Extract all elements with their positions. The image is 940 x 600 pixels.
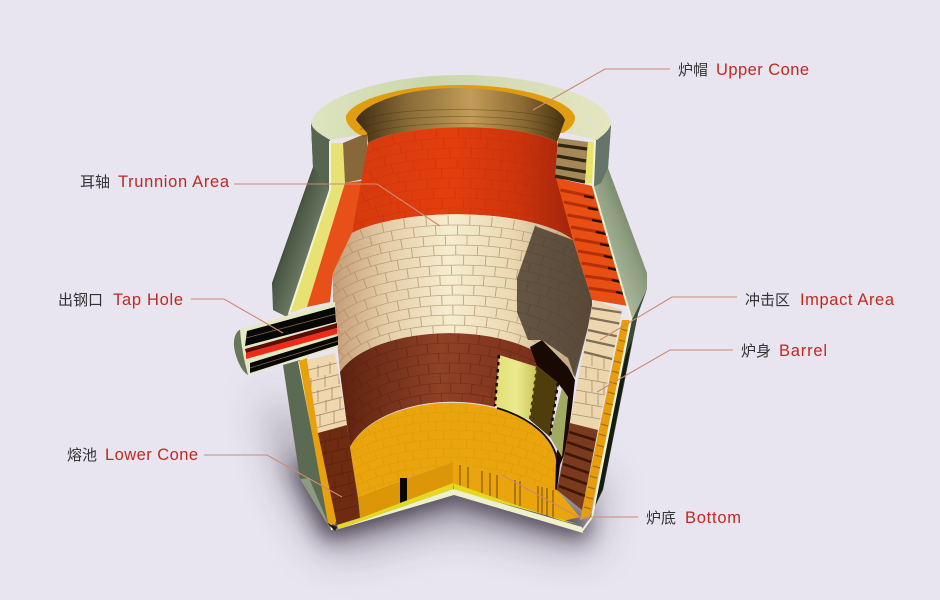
label: barrel: [597, 342, 827, 392]
left cut highlight: [289, 141, 332, 530]
tube red core dark: [245, 323, 337, 353]
left lower brown brick section: [318, 425, 360, 525]
rim opening orange ring: [346, 85, 575, 135]
label: upper cone: 炉帽: [678, 62, 708, 79]
vessel ground shadow: [262, 390, 600, 552]
tube body: [240, 302, 338, 375]
brown brick band: [340, 333, 538, 447]
label: trunnion area: [80, 173, 440, 226]
right cream stepped bricks: [570, 300, 624, 430]
label: tap hole: Tap Hole: [113, 291, 183, 309]
cast shadow on cream band: [517, 226, 592, 378]
left yellow insulation layer: [290, 143, 345, 313]
label: barrel: Barrel: [779, 342, 827, 360]
label: tap hole: [58, 291, 283, 333]
label: trunnion area: 耳轴: [80, 174, 110, 191]
left upper brown brick block: [343, 133, 368, 183]
tube end cap: [234, 328, 256, 375]
label: impact area: 冲击区: [745, 292, 790, 309]
red brick band: [352, 127, 573, 240]
label: upper cone: Upper Cone: [716, 61, 809, 79]
panel jagged edges: [495, 355, 558, 437]
left lower cream brick section: [307, 353, 347, 433]
label: barrel: 炉身: [741, 343, 771, 360]
tube black lower band: [250, 336, 338, 373]
label: lower cone: [67, 446, 342, 497]
right red stepped bricks: [556, 178, 628, 306]
label: bottom: Bottom: [685, 509, 741, 527]
floor front face right with stripes: [453, 462, 580, 521]
label: tap hole: 出钢口: [58, 292, 103, 309]
upper cone rim top surface: [311, 75, 611, 140]
tap hole tube: [234, 302, 338, 375]
exposed panel: light green: [550, 388, 568, 457]
exposed panel: olive: [530, 366, 558, 437]
upper cone interior brick: [356, 88, 565, 143]
label: trunnion area: Trunnion Area: [118, 173, 230, 191]
right orange-yellow stepped strip: [580, 320, 630, 520]
label: impact area: Impact Area: [800, 291, 895, 309]
floor front face left: [358, 462, 453, 518]
right upper brown brick block: [555, 138, 588, 183]
right upper yellow block: [585, 142, 595, 183]
left lower orange lining strip: [299, 358, 337, 525]
orange brick floor: [350, 402, 557, 498]
label: lower cone: Lower Cone: [105, 446, 198, 464]
label: bottom: 炉底: [646, 510, 676, 527]
label: upper cone: [533, 61, 809, 110]
label: bottom: [502, 475, 741, 527]
exposed panel: bright yellow: [495, 355, 537, 420]
floor yellow base layer: [337, 483, 578, 529]
tube black upper band: [245, 307, 336, 346]
black expansion slot: [400, 478, 407, 508]
dark cavity behind shell panel: [530, 340, 575, 490]
cream brick band: [325, 214, 595, 384]
right outer steel shell: [582, 125, 647, 533]
tube red core bright: [246, 328, 337, 359]
label: lower cone: 熔池: [67, 447, 97, 464]
right cut highlight: [582, 140, 631, 531]
floor white outer strip: [332, 489, 583, 533]
right brown stepped bricks: [557, 423, 598, 510]
left outer steel shell: [272, 122, 331, 530]
left orange lining layer: [307, 180, 367, 307]
converter vessel cutaway: [234, 75, 647, 544]
label: impact area: [600, 291, 895, 340]
